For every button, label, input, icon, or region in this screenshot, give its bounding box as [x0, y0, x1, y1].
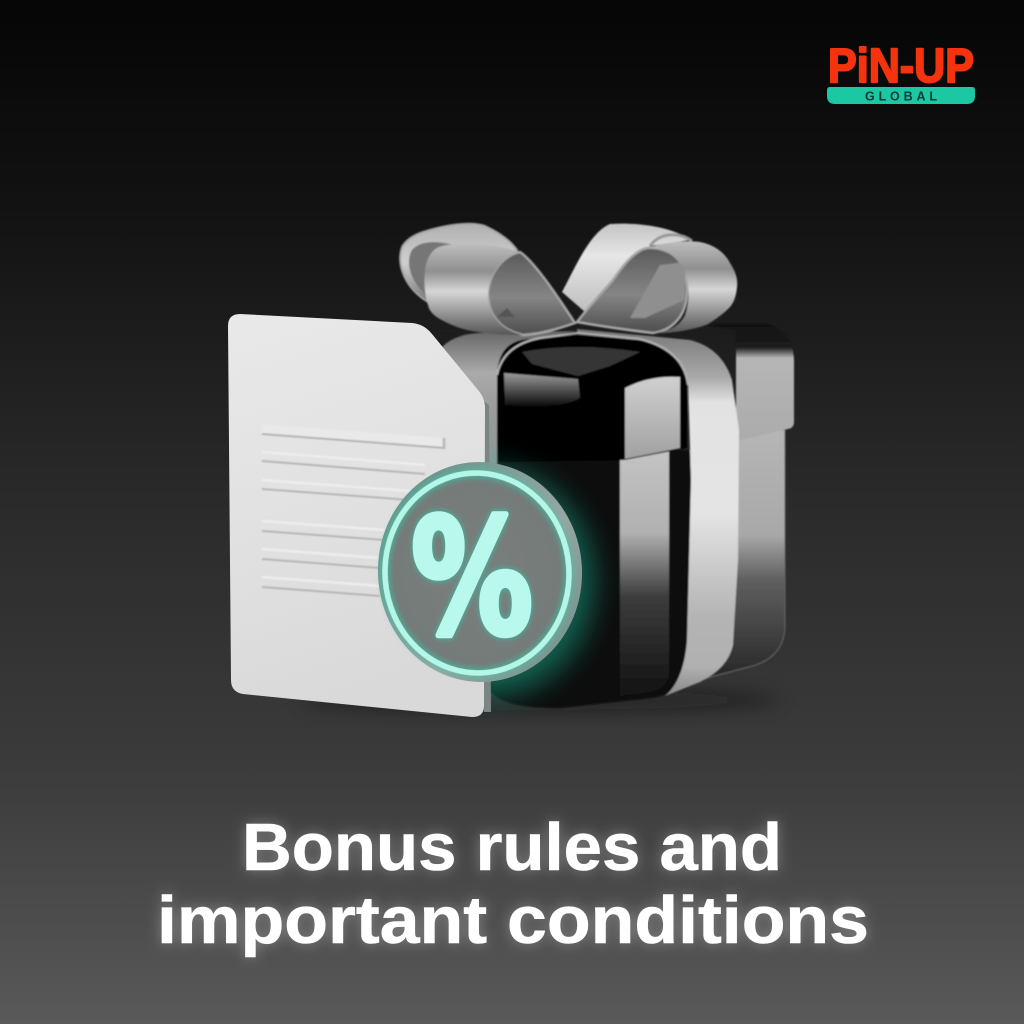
logo wordmark: PiN-UP	[828, 40, 974, 93]
coin neon ring	[378, 467, 576, 679]
lid glare top	[522, 347, 640, 376]
left back loop	[400, 224, 517, 302]
lid glare left	[504, 373, 580, 406]
coin face	[376, 465, 578, 681]
bow front loops	[424, 241, 737, 335]
percent sign: %	[411, 484, 533, 671]
left back loop opening	[409, 242, 460, 300]
lid top shelf	[415, 324, 520, 345]
coin glow on box	[386, 468, 594, 696]
box right body	[700, 430, 785, 680]
right inner loop	[577, 248, 687, 333]
box front body	[480, 450, 692, 708]
lid black front	[497, 335, 687, 462]
right back loop rim	[650, 235, 692, 246]
right back loop	[562, 224, 690, 315]
logo subtitle: GLOBAL	[865, 90, 937, 104]
floor shadow	[300, 690, 780, 710]
right outer loop	[647, 241, 737, 333]
coin edge	[371, 455, 589, 689]
document	[228, 314, 491, 717]
front body grey panel	[620, 449, 669, 696]
box lid	[415, 324, 794, 480]
logo: Pin-Up Global	[827, 40, 975, 104]
left outer loop	[424, 244, 523, 335]
logo teal bar	[827, 87, 975, 104]
percent coin	[371, 455, 589, 689]
illustration: gift box with document and percent coin	[228, 224, 794, 717]
lid right side	[700, 324, 794, 441]
vertical ribbon	[577, 329, 739, 696]
right loop inner reflection	[630, 262, 686, 318]
title line 2: important conditions	[157, 883, 869, 958]
bow back loops	[400, 224, 692, 315]
title	[157, 810, 869, 958]
ribbon arch rim	[497, 333, 688, 385]
left inner loop	[488, 252, 575, 335]
document text lines	[262, 424, 445, 596]
title line 1: Bonus rules and	[242, 810, 782, 885]
gift box	[400, 224, 794, 708]
lid grey panel	[625, 377, 680, 459]
left loop opening	[497, 308, 515, 317]
lid left silver band	[440, 331, 577, 480]
document back edge	[480, 398, 491, 712]
document sheet	[228, 314, 485, 717]
